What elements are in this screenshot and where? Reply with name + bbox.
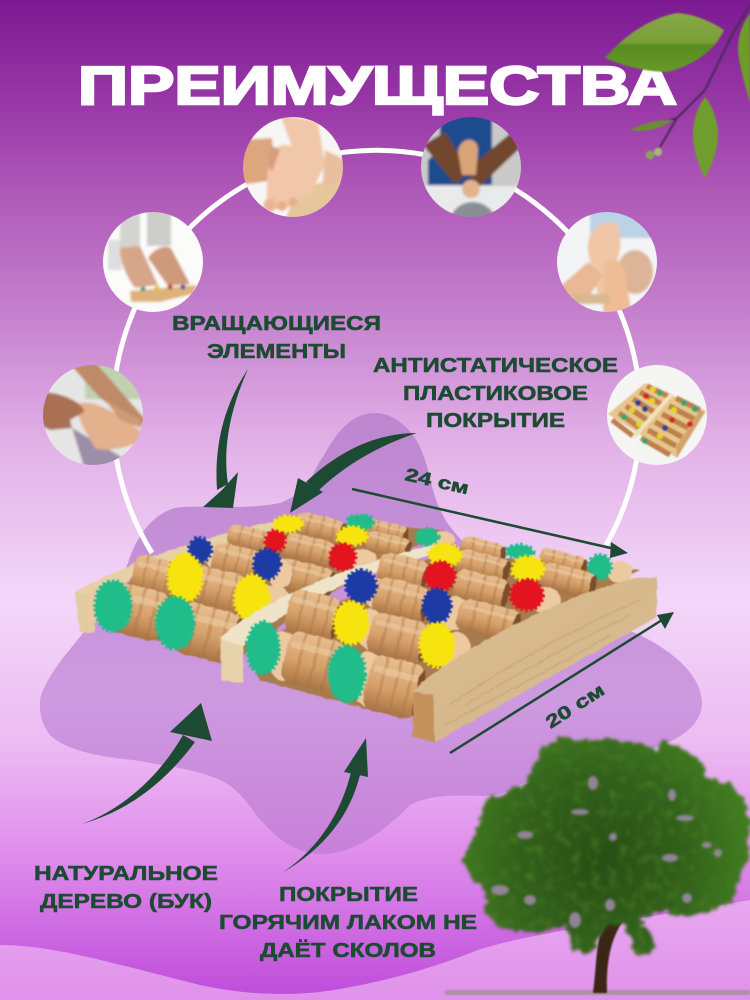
- trunk and boughs: [593, 885, 642, 993]
- label: rotating elements: ЭЛЕМЕНТЫ: [207, 340, 346, 363]
- photo: massager product: [607, 365, 707, 465]
- label: hot lacquer coating: ПОКРЫТИЕ: [279, 883, 418, 906]
- label: natural beech wood: [34, 862, 218, 913]
- left rack base and rail: [90, 520, 445, 662]
- label: natural beech wood: ДЕРЕВО (БУК): [40, 890, 212, 913]
- product: wooden foot massager: [75, 510, 657, 742]
- arrow: to rotating elements: [203, 369, 248, 508]
- label: antistatic plastic coating: [373, 354, 618, 432]
- dimension arrow: 20 cm: 20 см: [542, 680, 608, 732]
- bud: [646, 148, 662, 160]
- right rack front board: [413, 577, 657, 742]
- dimension arrow: 24 cm: [352, 464, 628, 558]
- branch: [645, 5, 750, 147]
- arrow: to plastic coating: [290, 433, 417, 513]
- label: hot lacquer coating: ДАЁТ СКОЛОВ: [260, 939, 436, 962]
- edge leaf: [738, 13, 750, 103]
- title: ПРЕИМУЩЕСТВА: [78, 56, 677, 116]
- label: rotating elements: [172, 312, 381, 363]
- arrow: to natural wood: [82, 703, 212, 824]
- dimension arrow: 20 cm: [450, 612, 674, 753]
- arrow: to lacquer coating: [282, 738, 368, 873]
- photo: feet on the massager: [103, 212, 203, 312]
- left rack rollers, back to front: [87, 510, 455, 666]
- small leaf: [630, 120, 673, 131]
- icon: leaves on branch: [605, 5, 750, 178]
- photo: therapist hands on foot: [421, 117, 521, 217]
- label: hot lacquer coating: [219, 883, 477, 962]
- photo: hands massaging sole: [243, 117, 343, 217]
- large leaf: [605, 13, 724, 72]
- photo: foot massage on towel: [43, 365, 143, 465]
- right rack rollers, back to front: [247, 535, 633, 721]
- label: antistatic plastic coating: ПЛАСТИКОВОЕ: [403, 382, 588, 405]
- label: hot lacquer coating: ГОРЯЧИМ ЛАКОМ НЕ: [219, 911, 477, 934]
- icon: tree: [445, 737, 750, 995]
- label: natural beech wood: НАТУРАЛЬНОЕ: [34, 862, 218, 885]
- ground strip: [445, 990, 750, 995]
- lilac gaps in foliage: [491, 776, 722, 928]
- middle rail between racks: [220, 545, 438, 683]
- dimension arrow: 24 cm: 24 см: [403, 464, 471, 498]
- label: antistatic plastic coating: АНТИСТАТИЧЕСКОЕ: [373, 354, 618, 377]
- hanging leaf: [693, 97, 718, 178]
- crown foliage: [462, 737, 750, 957]
- label: rotating elements: ВРАЩАЮЩИЕСЯ: [172, 312, 381, 335]
- decorative blob behind product: [40, 413, 702, 854]
- white ring connecting photos: [113, 150, 641, 553]
- right rack base: [246, 553, 640, 718]
- label: antistatic plastic coating: ПОКРЫТИЕ: [426, 409, 565, 432]
- photo: hands on sole close-up: [557, 212, 657, 312]
- bottom wave: [0, 900, 750, 1000]
